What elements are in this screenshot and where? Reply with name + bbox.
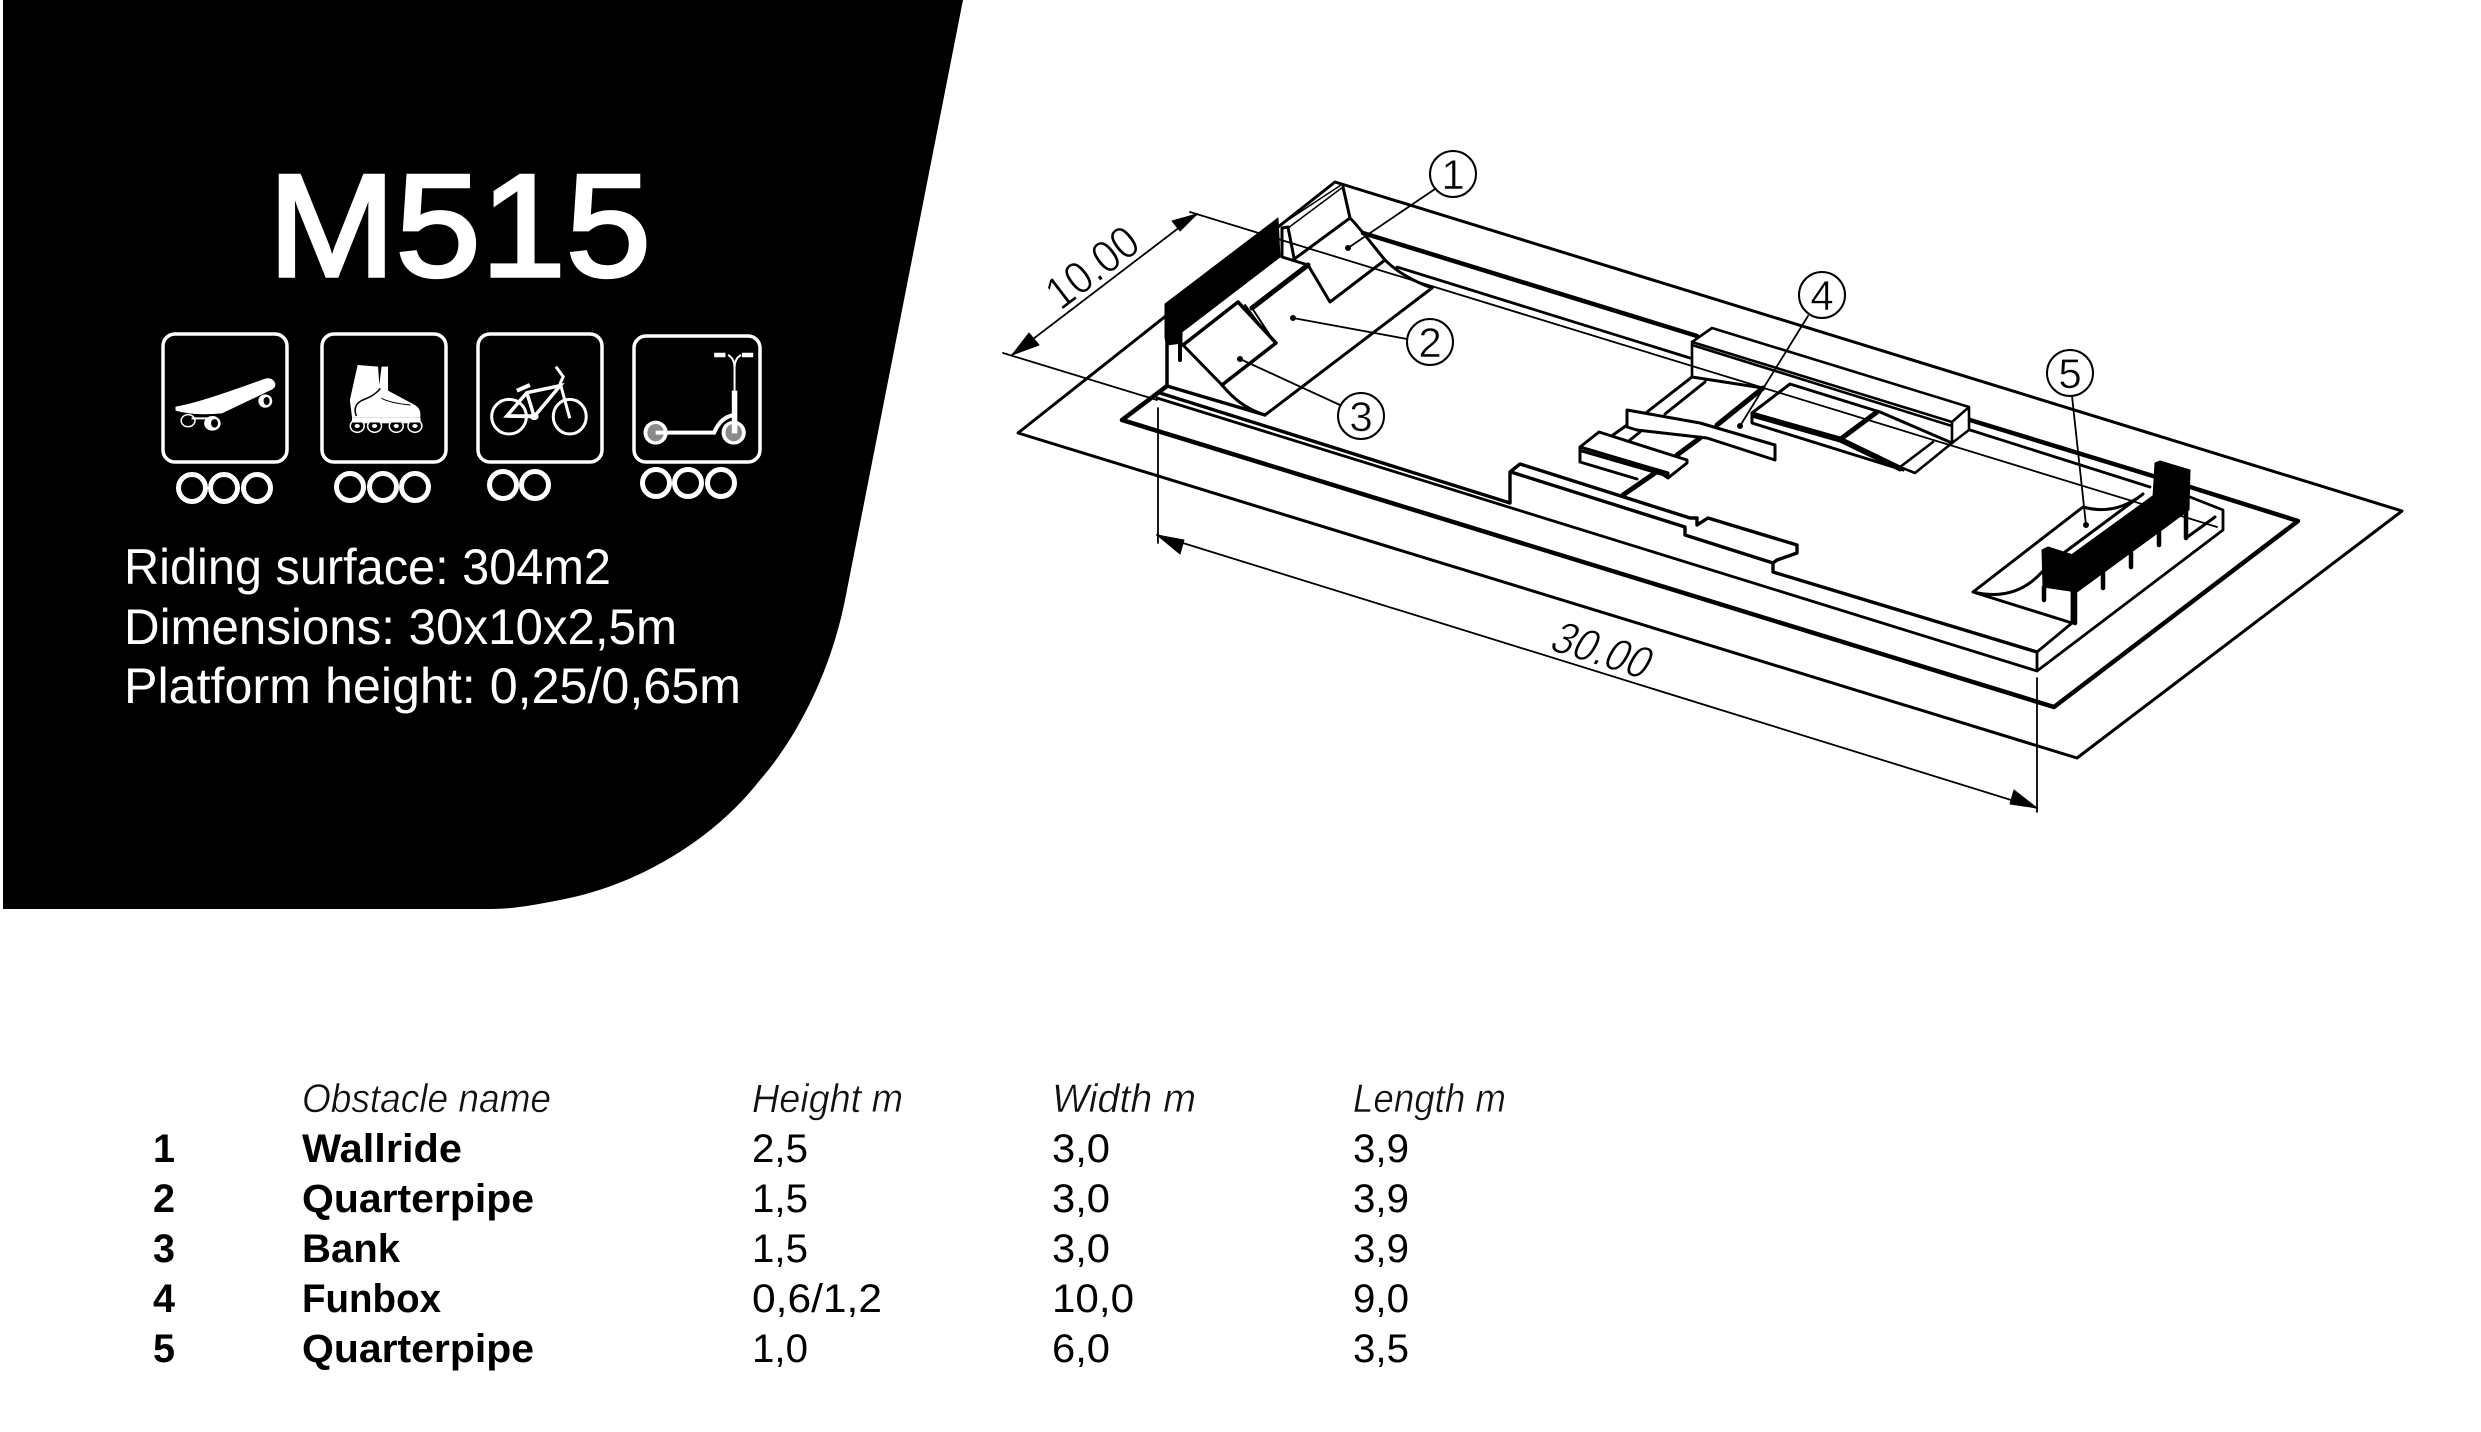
row 5: 5 xyxy=(153,1327,175,1371)
callout 1: 1 xyxy=(1441,151,1465,198)
title: M515: M515 xyxy=(268,144,651,307)
row 2: 3,0 xyxy=(1052,1177,1110,1221)
callout 5 xyxy=(2047,350,2093,528)
dimension extension lines xyxy=(1003,212,2217,812)
callout 2: 2 xyxy=(1418,319,1442,366)
row 5 xyxy=(153,1327,1409,1371)
dimension: 30.00 xyxy=(1157,535,2037,808)
callout 4: 4 xyxy=(1810,272,1834,319)
table: obstacle dimensions xyxy=(153,1077,1506,1371)
table header: Height m xyxy=(752,1077,903,1121)
row 5: 1,0 xyxy=(752,1327,808,1371)
icon group: rider disciplines xyxy=(163,334,760,502)
row 4: 10,0 xyxy=(1052,1277,1134,1321)
ramp: quarterpipe and bank xyxy=(1183,185,1432,415)
platform edges xyxy=(1157,267,2223,671)
icon: inline skate xyxy=(322,334,446,462)
left wall posts xyxy=(1165,340,1169,385)
callout 3 xyxy=(1238,356,1384,440)
panel: black specification panel xyxy=(3,0,963,909)
icon: BMX bike xyxy=(478,334,602,462)
row 4: 9,0 xyxy=(1353,1277,1409,1321)
chart: isometric skatepark drawing xyxy=(1003,151,2402,812)
inner thick outline xyxy=(1122,233,2298,707)
end quarterpipe xyxy=(1973,494,2215,623)
callout 2 xyxy=(1290,316,1453,366)
row 4: Funbox xyxy=(302,1277,441,1321)
end wall (black) xyxy=(2042,461,2190,592)
row 1: 1 xyxy=(153,1127,175,1171)
row 2: 2 xyxy=(153,1177,175,1221)
funbox xyxy=(1580,328,1969,495)
row 3: 3 xyxy=(153,1227,175,1271)
text block: specifications xyxy=(124,539,741,714)
callout 1 xyxy=(1346,151,1476,250)
callout 5: 5 xyxy=(2058,350,2082,397)
text block: specifications: Dimensions: 30x10x2,5m xyxy=(124,599,677,655)
rating: ring marks under icons xyxy=(178,470,734,502)
row 2: Quarterpipe xyxy=(302,1177,534,1221)
dimension: 10.00: 10.00 xyxy=(1035,215,1149,319)
row 4: 0,6/1,2 xyxy=(752,1277,882,1321)
row 2: 1,5 xyxy=(752,1177,808,1221)
row 4 xyxy=(153,1277,1409,1321)
icon: skateboard xyxy=(163,334,287,462)
row 3: 3,0 xyxy=(1052,1227,1110,1271)
left wall (black) xyxy=(1165,218,1280,345)
dimension: 10.00 xyxy=(1012,214,1197,355)
table header: Length m xyxy=(1353,1077,1506,1121)
row 1: 2,5 xyxy=(752,1127,808,1171)
outer ground outline xyxy=(1018,182,2402,758)
row 3: 1,5 xyxy=(752,1227,808,1271)
icon: scooter xyxy=(634,336,760,462)
row 1: 3,0 xyxy=(1052,1127,1110,1171)
row 1: 3,9 xyxy=(1353,1127,1409,1171)
row 3: Bank xyxy=(302,1227,401,1271)
row 5: 3,5 xyxy=(1353,1327,1409,1371)
row 1: Wallride xyxy=(302,1127,462,1171)
text block: specifications: Platform height: 0,25/0,65m xyxy=(124,658,741,714)
text block: specifications: Riding surface: 304m2 xyxy=(124,539,611,595)
row 5: 6,0 xyxy=(1052,1327,1110,1371)
row 2: 3,9 xyxy=(1353,1177,1409,1221)
dimension: 30.00: 30.00 xyxy=(1542,612,1664,688)
table header: Width m xyxy=(1052,1077,1196,1121)
table header xyxy=(302,1077,1506,1121)
callout 4 xyxy=(1738,272,1845,428)
platform front edge and ledges xyxy=(1160,386,2037,652)
row 3: 3,9 xyxy=(1353,1227,1409,1271)
row 5: Quarterpipe xyxy=(302,1327,534,1371)
callout 3: 3 xyxy=(1349,393,1373,440)
row 4: 4 xyxy=(153,1277,176,1321)
wall legs xyxy=(2044,510,2186,623)
table header: Obstacle name xyxy=(302,1077,551,1121)
row 1 xyxy=(153,1127,1409,1171)
row 2 xyxy=(153,1177,1409,1221)
row 3 xyxy=(153,1227,1409,1271)
